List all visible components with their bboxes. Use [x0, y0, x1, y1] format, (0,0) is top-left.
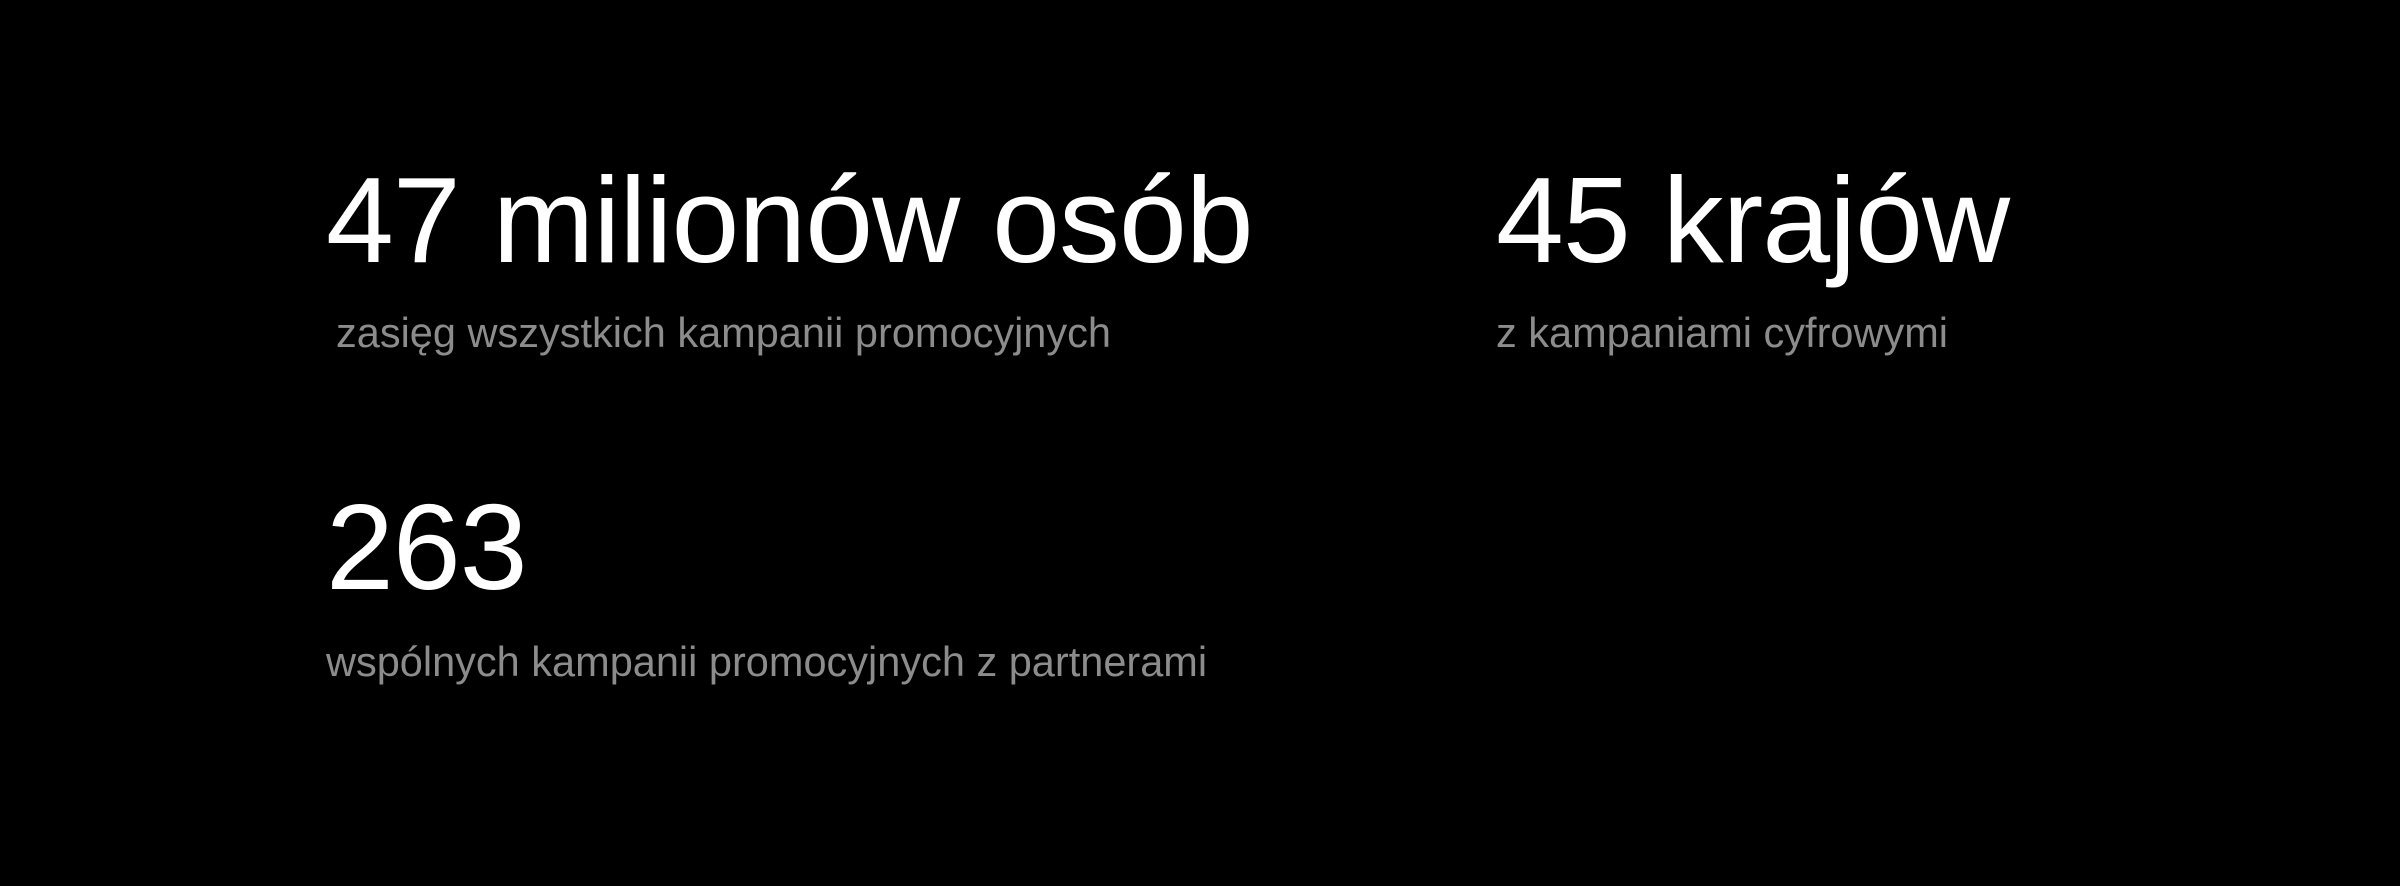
- stat: 263 campaigns: [326, 479, 1207, 685]
- subtitle: joint campaigns with partners: wspólnych kampanii promocyjnych z partnerami: [326, 638, 1207, 685]
- subtitle: campaign reach: zasięg wszystkich kampanii promocyjnych: [336, 309, 1111, 356]
- heading: 47 milionów osób: 47 milionów osób: [326, 152, 1253, 288]
- subtitle: digital campaigns: z kampaniami cyfrowymi: [1496, 309, 1948, 356]
- stat: 47 million people: [326, 152, 1253, 356]
- heading: 263: 263: [326, 479, 527, 615]
- stat: 45 countries: [1496, 152, 2010, 356]
- heading: 45 krajów: 45 krajów: [1496, 152, 2009, 288]
